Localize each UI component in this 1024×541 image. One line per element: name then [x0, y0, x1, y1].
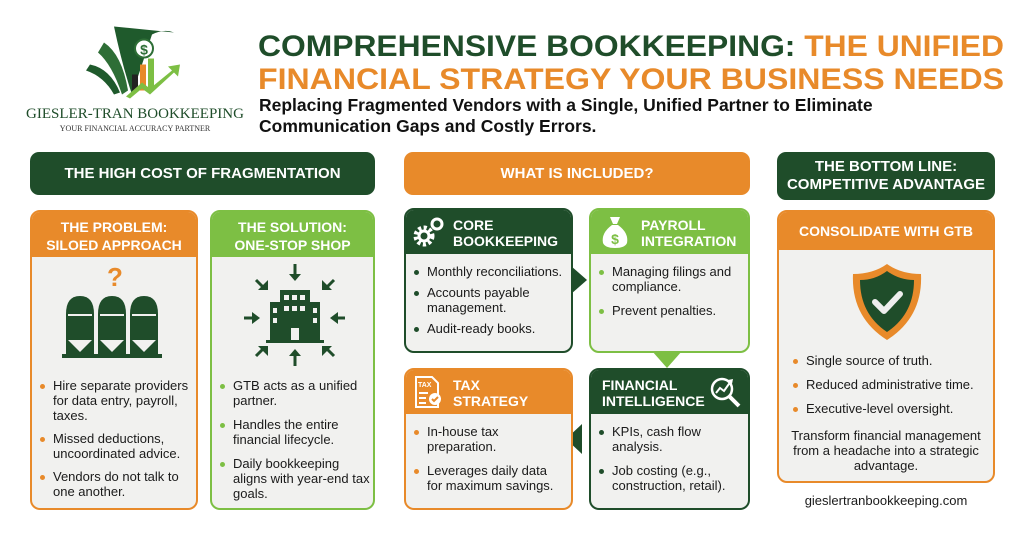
consolidate bullets: [793, 353, 974, 416]
logo mark: $: [140, 42, 148, 58]
panel: core bookkeeping: Accounts payable management.: [427, 285, 530, 315]
icon: shield check: [852, 264, 922, 340]
core heading: CORE: [453, 217, 493, 233]
problem bullets: [40, 378, 188, 499]
title: FINANCIAL STRATEGY YOUR BUSINESS NEEDS: [258, 63, 1004, 96]
subtitle: [259, 95, 873, 136]
consolidate bullets: Reduced administrative time.: [806, 377, 974, 392]
band: high cost of fragmentation: [30, 152, 375, 195]
subtitle: Communication Gaps and Costly Errors.: [259, 116, 596, 136]
problem heading: [32, 212, 196, 257]
icon: tax document: [415, 376, 441, 408]
tax heading: [406, 370, 571, 414]
payroll heading: INTEGRATION: [641, 233, 736, 249]
solution heading: THE SOLUTION:: [238, 219, 347, 235]
panel: solution: [210, 210, 375, 510]
panel: payroll integration: Prevent penalties.: [612, 303, 716, 318]
icon: gears: [414, 218, 444, 246]
arrow: financial intelligence to tax: [566, 424, 582, 454]
icon: magnifier chart: [710, 378, 740, 408]
logo: [26, 26, 244, 133]
icon: money bag: [602, 217, 628, 248]
panel: payroll integration: Managing filings and compliance.: [612, 264, 731, 294]
consolidate bullets: Single source of truth.: [806, 353, 932, 368]
panel: core bookkeeping: [404, 208, 573, 353]
title: [258, 30, 1004, 96]
website url: gieslertranbookkeeping.com: [805, 493, 967, 508]
panel: tax strategy: [404, 368, 573, 510]
financial intelligence heading: [591, 370, 748, 414]
solution bullets: Handles the entire financial lifecycle.: [233, 417, 339, 447]
panel: financial intelligence: [589, 368, 750, 510]
panel: financial intelligence: KPIs, cash flow analysis.: [612, 424, 701, 454]
panel: payroll integration: [589, 208, 750, 353]
arrow: payroll to financial intelligence: [652, 351, 682, 368]
solution bullets: GTB acts as a unified partner.: [233, 378, 357, 408]
icon: building with arrows: [244, 264, 345, 366]
tax heading: TAX: [453, 377, 480, 393]
arrow: core to payroll: [571, 266, 587, 294]
logo tagline: YOUR FINANCIAL ACCURACY PARTNER: [60, 124, 210, 133]
panel: financial intelligence: Job costing (e.g., construction, retail).: [612, 463, 725, 493]
problem heading: THE PROBLEM:: [61, 219, 167, 235]
icon: money bag: $: [611, 231, 619, 247]
icon: tax document: TAX: [418, 382, 432, 389]
band: bottom line: COMPETITIVE ADVANTAGE: [787, 176, 985, 193]
panel: consolidate with gtb: [777, 210, 995, 483]
problem bullets: Hire separate providers for data entry, payroll, taxes.: [53, 378, 188, 423]
subtitle: Replacing Fragmented Vendors with a Single, Unified Partner to Eliminate: [259, 95, 873, 115]
solution bullets: [220, 378, 370, 501]
core heading: [406, 210, 571, 254]
payroll heading: PAYROLL: [641, 217, 706, 233]
financial intelligence heading: INTELLIGENCE: [602, 393, 705, 409]
tax heading: STRATEGY: [453, 393, 528, 409]
consolidate bullets: Executive-level oversight.: [806, 401, 953, 416]
financial intelligence heading: FINANCIAL: [602, 377, 677, 393]
band: what is included: WHAT IS INCLUDED?: [500, 164, 654, 182]
consolidate heading: [779, 212, 993, 250]
title: COMPREHENSIVE BOOKKEEPING: THE UNIFIED: [258, 30, 1004, 63]
panel: tax strategy: In-house tax preparation.: [427, 424, 499, 454]
logo name: GIESLER-TRAN BOOKKEEPING: [26, 106, 244, 122]
payroll heading: [591, 210, 748, 254]
problem heading: SILOED APPROACH: [46, 237, 182, 253]
solution bullets: Daily bookkeeping aligns with year-end tax goals.: [233, 456, 370, 501]
band: what is included: [404, 152, 750, 195]
core heading: BOOKKEEPING: [453, 233, 558, 249]
panel: core bookkeeping: Audit-ready books.: [427, 321, 535, 336]
problem bullets: Vendors do not talk to one another.: [53, 469, 179, 499]
band: bottom line: THE BOTTOM LINE:: [815, 158, 957, 175]
solution heading: [212, 212, 373, 257]
consolidate heading: CONSOLIDATE WITH GTB: [799, 223, 973, 239]
closing statement: Transform financial management from a headache into a strategic advantage.: [791, 428, 981, 473]
panel: problem: [30, 210, 198, 510]
band: bottom line: [777, 152, 995, 200]
logo mark: [86, 26, 180, 98]
problem bullets: Missed deductions, uncoordinated advice.: [53, 431, 180, 461]
solution heading: ONE-STOP SHOP: [234, 237, 351, 253]
panel: tax strategy: Leverages daily data for maximum savings.: [427, 463, 553, 493]
panel: core bookkeeping: Monthly reconciliations.: [427, 264, 562, 279]
band: high cost of fragmentation: THE HIGH COST OF FRAGMENTATION: [64, 164, 341, 182]
icon: silos: [62, 264, 162, 358]
